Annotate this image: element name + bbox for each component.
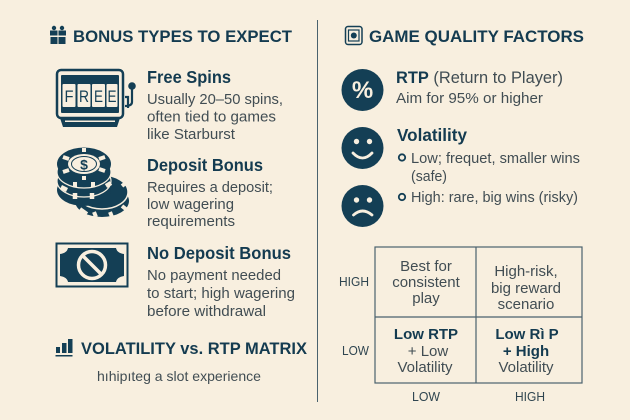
text: free spins description: Usually 20–50 spins, — [147, 91, 283, 108]
cell: high high: scenario — [498, 296, 554, 313]
matrix chart — [339, 247, 582, 404]
cell: high low: play — [412, 290, 440, 307]
icon: gift — [50, 26, 66, 44]
icon: sad face — [342, 185, 384, 227]
icon: slot machine: F — [64, 87, 74, 106]
text: no deposit description: before withdrawal — [147, 303, 266, 320]
cell: low high — [495, 326, 559, 376]
cell: high low — [392, 258, 461, 307]
text: deposit bonus description: low wagering — [147, 196, 234, 213]
bullet: high volatility: High: rare, big wins (risky) — [411, 189, 578, 206]
axis labels: LOW — [342, 343, 370, 358]
cell: low low: + Low — [408, 343, 448, 360]
text: deposit bonus description — [147, 179, 273, 230]
text: deposit bonus description: requirements — [147, 213, 235, 230]
label: no deposit bonus: No Deposit Bonus — [147, 243, 291, 263]
text: free spins description: like Starburst — [147, 126, 236, 143]
axis labels: HIGH — [515, 389, 545, 404]
cell: high high: big reward — [491, 280, 561, 297]
cell: low low: Volatility — [397, 359, 453, 376]
label: rtp: RTP (Return to Player) — [396, 68, 563, 87]
axis labels: HIGH — [339, 274, 369, 289]
icon: casino chips — [57, 148, 129, 217]
axis labels: LOW — [412, 389, 441, 404]
cell: low high: Volatility — [498, 359, 554, 376]
cell: low high: + High — [503, 343, 549, 360]
bullet: low volatility — [399, 150, 580, 185]
text: free spins description — [147, 91, 283, 143]
icon: casino chips: $ — [80, 156, 88, 172]
text: rtp aim: Aim for 95% or higher — [396, 90, 543, 107]
cell: high high — [491, 263, 561, 313]
text: deposit bonus description: Requires a deposit; — [147, 179, 273, 196]
bullet: low volatility: Low; frequet, smaller wins — [411, 150, 580, 167]
icon: slot machine: E — [94, 87, 103, 106]
text: no deposit description: No payment needed — [147, 267, 281, 284]
icon: game quality — [346, 26, 362, 44]
bullet: low volatility: (safe) — [411, 168, 447, 185]
icon: banknote with prohibition sign — [56, 244, 128, 286]
cell: low low: Low RTP — [394, 326, 458, 343]
cell: high high: High-risk, — [494, 263, 558, 280]
heading: matrix: VOLATILITY vs. RTP MATRIX — [81, 339, 308, 358]
text: free spins description: often tied to games — [147, 108, 276, 126]
text: no deposit description — [147, 267, 295, 320]
icon: slot machine — [57, 70, 136, 127]
caption: hıhipıteg a slot experience — [97, 368, 261, 384]
icon: percent: % — [352, 77, 373, 104]
icon: percent — [342, 69, 384, 111]
label: deposit bonus: Deposit Bonus — [147, 155, 263, 175]
label: volatility: Volatility — [397, 125, 467, 145]
icon: slot machine: R — [79, 87, 89, 106]
cell: high low: Best for — [400, 258, 452, 275]
axis labels — [339, 274, 545, 404]
icon: smiling face — [342, 127, 384, 169]
heading: bonus types: BONUS TYPES TO EXPECT — [73, 27, 293, 46]
icon: bar chart — [56, 339, 72, 356]
text: no deposit description: to start; high wagering — [147, 285, 295, 302]
icon: slot machine: E — [108, 87, 116, 106]
cell: high low: consistent — [392, 274, 461, 291]
label: free spins: Free Spins — [147, 67, 231, 87]
cell: low high: Low Rì P — [495, 326, 559, 343]
cell: low low — [394, 326, 458, 376]
heading: game quality: GAME QUALITY FACTORS — [369, 27, 584, 46]
